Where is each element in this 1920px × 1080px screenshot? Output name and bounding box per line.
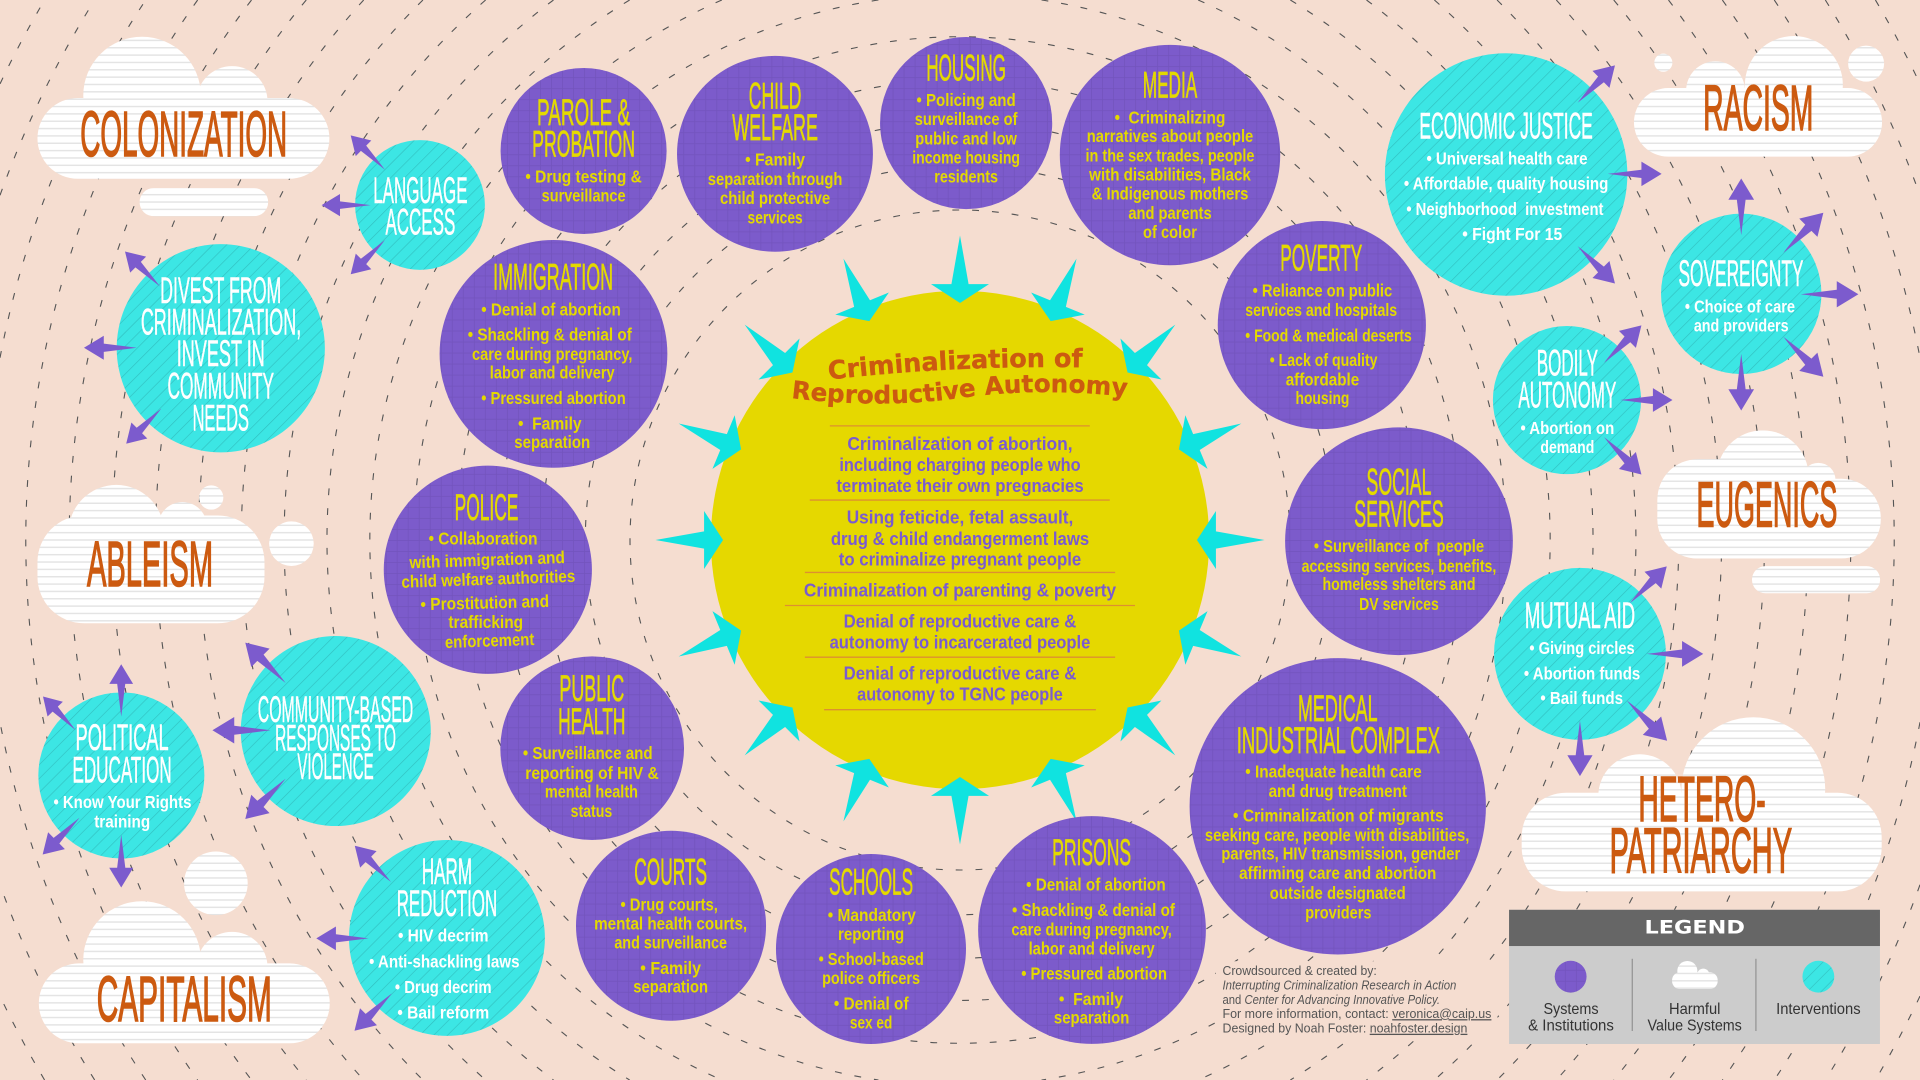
panel: schools [776, 854, 966, 1044]
panel: prisons: care during pregnancy, [1011, 920, 1172, 940]
central list of criminalization forms: including charging people who [839, 454, 1081, 475]
panel: mutual aid [1494, 558, 1703, 776]
panel: medical industrial complex: seeking care, people with disabilities, [1205, 825, 1469, 845]
heading: heteropatriarchy [1610, 764, 1792, 887]
panel: poverty: services and hospitals [1245, 300, 1397, 320]
panel: prisons: separation [1054, 1007, 1129, 1027]
legend item: systems & institutions: & Institutions [1528, 1018, 1614, 1035]
arrows [84, 244, 169, 452]
panel: economic justice: • Fight For 15 [1462, 224, 1563, 244]
panel: immigration: • Denial of abortion [481, 300, 621, 320]
panel: bodily autonomy: AUTONOMY [1518, 374, 1616, 416]
panel: police: trafficking [448, 612, 523, 632]
panel: schools: reporting [838, 924, 904, 944]
panel: poverty: • Food & medical deserts [1245, 326, 1412, 346]
panel: harm reduction [316, 838, 545, 1039]
panel: public health: HEALTH [558, 700, 625, 742]
panel: mutual aid: MUTUAL AID [1525, 594, 1635, 636]
panel: medical industrial complex: providers [1305, 902, 1371, 922]
panel: economic justice: • Universal health care [1426, 148, 1588, 168]
panel: public health: reporting of HIV & [525, 763, 659, 783]
panel: courts: separation [633, 977, 708, 997]
panel: police: enforcement [445, 629, 535, 652]
panel: parole & probation: • Drug testing & [525, 166, 642, 186]
legend [1509, 910, 1880, 1044]
panel: medical industrial complex [1190, 658, 1486, 954]
panel: economic justice: ECONOMIC JUSTICE [1419, 104, 1593, 146]
panel: housing: public and low [915, 128, 1017, 148]
panel: schools: • Denial of [834, 993, 909, 1013]
cloud: ableism: ABLEISM [87, 529, 213, 600]
panel: political education: POLITICAL [76, 716, 169, 758]
panel: immigration: care during pregnancy, [472, 344, 632, 364]
spikes pointing inward [655, 235, 1265, 845]
panel: political education: • Know Your Rights [53, 792, 191, 812]
arrows [1567, 558, 1703, 776]
legend item: harmful value systems [1648, 961, 1742, 1035]
panel: police: • Collaboration [429, 528, 538, 548]
panel: language access [322, 128, 485, 282]
panel: prisons: PRISONS [1052, 831, 1131, 873]
cloud: eugenics [1657, 430, 1881, 593]
panel: media: with disabilities, Black [1088, 164, 1251, 184]
panel: schools: police officers [822, 968, 920, 988]
panel: prisons: • Pressured abortion [1021, 963, 1167, 983]
panel: divest from criminalization: CRIMINALIZATION, [141, 301, 301, 343]
legend item: systems & institutions: Systems [1543, 1001, 1599, 1018]
panel: economic justice: • Affordable, quality housing [1404, 173, 1608, 193]
panel: sovereignty: and providers [1694, 316, 1789, 336]
panel: immigration: IMMIGRATION [493, 256, 613, 298]
central list of criminalization forms: Denial of reproductive care & [844, 611, 1076, 632]
panel: language access: LANGUAGE [373, 169, 468, 211]
panel: mutual aid: • Giving circles [1529, 638, 1635, 658]
panel: social services: • Surveillance of people [1314, 536, 1484, 556]
panel: media: narratives about people [1087, 126, 1254, 146]
panel: police: POLICE [455, 486, 518, 528]
panel: political education: EDUCATION [72, 748, 172, 790]
central list of criminalization forms: Denial of reproductive care & [844, 662, 1076, 683]
panel: divest from criminalization: COMMUNITY [168, 364, 274, 406]
arrows [1596, 317, 1673, 483]
panel: housing: • Policing and [917, 90, 1016, 110]
panel: divest from criminalization: NEEDS [193, 396, 249, 438]
cloud: colonization: COLONIZATION [80, 99, 287, 170]
panel: schools: • School-based [819, 949, 924, 969]
arrows [212, 633, 295, 828]
panel: housing: HOUSING [926, 47, 1006, 89]
panel: media: of color [1143, 222, 1197, 242]
panel: media: & Indigenous mothers [1092, 184, 1248, 204]
panel: medical industrial complex: MEDICAL [1298, 687, 1378, 729]
panel: schools: sex ed [850, 1013, 892, 1033]
panel: child welfare: • Family [745, 150, 805, 170]
panel: courts: • Drug courts, [621, 895, 718, 915]
panel: social services: accessing services, benefits, [1302, 556, 1496, 576]
credits text block: For more information, contact: veronica@caip.us [1223, 1006, 1491, 1021]
panel: police: • Prostitution and [420, 591, 549, 614]
panel: political education: training [94, 811, 150, 831]
panel: child welfare [677, 56, 873, 252]
cloud: ableism [37, 485, 314, 623]
panel: medical industrial complex: • Inadequate health care [1245, 762, 1422, 782]
panel: public health [500, 656, 684, 840]
panel: sovereignty [1661, 179, 1858, 410]
panel: sovereignty: • Choice of care [1685, 297, 1795, 317]
panel: harm reduction: • HIV decrim [398, 926, 489, 946]
panel: courts: • Family [640, 958, 701, 978]
panel: bodily autonomy: • Abortion on [1520, 418, 1614, 438]
panel: immigration: • Pressured abortion [481, 388, 626, 408]
heading: heteropatriarchy: HETERO- [1638, 764, 1766, 835]
panel: divest from criminalization: DIVEST FROM [160, 269, 281, 311]
panel: immigration: • Family [518, 413, 582, 433]
panel: parole & probation: PAROLE & [537, 91, 630, 133]
panel: medical industrial complex: affirming care and abortion [1239, 863, 1436, 883]
panel: child welfare: services [748, 207, 803, 227]
panel: economic justice [1385, 53, 1662, 296]
panel: courts [576, 831, 766, 1021]
central title: Reproductive Autonomy [793, 375, 1128, 408]
legend item: harmful value systems: Harmful [1669, 1001, 1720, 1018]
panel: police: child welfare authorities [401, 566, 576, 592]
panel: public health: • Surveillance and [523, 743, 653, 763]
panel: language access: ACCESS [385, 200, 455, 242]
credits text block: Designed by Noah Foster: noahfoster.design [1223, 1021, 1467, 1036]
central title: Criminalization of [828, 348, 1084, 379]
panel: media: • Criminalizing [1115, 107, 1225, 127]
central title [793, 348, 1128, 408]
credits text block [1216, 961, 1498, 1040]
cloud: capitalism: CAPITALISM [97, 964, 272, 1035]
panel: divest from criminalization: INVEST IN [177, 332, 265, 374]
central list of criminalization forms: Criminalization of abortion, [847, 433, 1073, 454]
panel: prisons: • Family [1059, 989, 1123, 1009]
panel: courts: mental health courts, [594, 913, 747, 933]
panel: immigration [440, 240, 667, 468]
panel: parole & probation [501, 68, 667, 234]
panel: social services: SERVICES [1354, 493, 1444, 535]
credits text block: Interrupting Criminalization Research in Action [1223, 977, 1456, 992]
central list of criminalization forms: drug & child endangerment laws [831, 528, 1089, 549]
panel: harm reduction: • Bail reform [397, 1002, 489, 1022]
arrows [322, 128, 393, 282]
panel: social services: homeless shelters and [1322, 574, 1476, 594]
panel: prisons: • Denial of abortion [1026, 875, 1166, 895]
cloud: capitalism [39, 852, 330, 1043]
cloud: heteropatriarchy [1522, 717, 1882, 891]
central list of criminalization forms [785, 426, 1135, 710]
panel: community-based responses: VIOLENCE [297, 745, 374, 787]
panel: immigration: • Shackling & denial of [468, 324, 632, 344]
panel: medical industrial complex: outside designated [1270, 883, 1406, 903]
panel: medical industrial complex: INDUSTRIAL COMPLEX [1237, 719, 1440, 761]
panel: social services: SOCIAL [1367, 461, 1431, 503]
panel: harm reduction: REDUCTION [397, 882, 497, 924]
central list of criminalization forms: autonomy to incarcerated people [830, 632, 1090, 653]
text: COMMUNITY-BASED [258, 688, 413, 730]
panel: child welfare: WELFARE [732, 106, 818, 148]
central list of criminalization forms: Using feticide, fetal assault, [847, 506, 1073, 527]
arrows [316, 838, 400, 1039]
legend: LEGEND [1644, 918, 1745, 939]
panel: schools: • Mandatory [828, 905, 916, 925]
cloud: racism [1634, 36, 1884, 157]
panel: bodily autonomy [1493, 317, 1673, 483]
panel: social services [1285, 427, 1513, 655]
panel: community-based responses [212, 633, 431, 828]
central list of criminalization forms: to criminalize pregnant people [839, 549, 1081, 570]
panel: housing: income housing [912, 147, 1020, 167]
panel: media: MEDIA [1143, 63, 1197, 105]
legend item: interventions: Interventions [1776, 1001, 1861, 1018]
panel: courts: and surveillance [614, 933, 727, 953]
panel: medical industrial complex: parents, HIV transmission, gender [1221, 844, 1460, 864]
panel: bodily autonomy: BODILY [1537, 342, 1598, 384]
panel: mutual aid: • Bail funds [1540, 688, 1623, 708]
panel: public health: mental health [545, 782, 638, 802]
legend item: interventions [1776, 961, 1861, 1018]
panel: harm reduction: HARM [422, 850, 472, 892]
panel: housing: residents [934, 166, 998, 186]
panel: political education [34, 664, 204, 888]
legend item: systems & institutions [1528, 961, 1614, 1035]
panel: poverty: housing [1296, 388, 1349, 408]
panel: child welfare: separation through [708, 169, 842, 189]
panel: poverty: affordable [1286, 370, 1359, 390]
panel: parole & probation: surveillance [542, 186, 626, 206]
panel: media [1060, 45, 1280, 265]
panel: central sun [656, 236, 1264, 844]
panel: immigration: labor and delivery [490, 363, 615, 383]
panel: poverty: • Lack of quality [1270, 350, 1378, 370]
panel: prisons: labor and delivery [1029, 938, 1155, 958]
panel: poverty: • Reliance on public [1253, 280, 1393, 300]
panel: bodily autonomy: demand [1540, 437, 1594, 457]
panel: harm reduction: • Drug decrim [395, 977, 492, 997]
panel: media: and parents [1128, 203, 1212, 223]
panel: prisons [978, 816, 1206, 1044]
panel: courts: COURTS [634, 850, 707, 892]
panel: child welfare: child protective [720, 188, 830, 208]
panel: medical industrial complex: • Criminalization of migrants [1233, 806, 1444, 826]
panel: public health: status [571, 801, 612, 821]
legend item: harmful value systems: Value Systems [1648, 1018, 1742, 1035]
panel: housing: surveillance of [915, 109, 1018, 129]
panel: prisons: • Shackling & denial of [1012, 900, 1175, 920]
panel: mutual aid: • Abortion funds [1524, 663, 1640, 683]
panel: economic justice: • Neighborhood investment [1406, 199, 1604, 219]
panel: schools: SCHOOLS [829, 860, 913, 902]
credits text block: and Center for Advancing Innovative Policy. [1223, 992, 1440, 1007]
panel: police: with immigration and [408, 547, 565, 572]
cloud: colonization [37, 37, 329, 216]
credits text block: Crowdsourced & created by: [1223, 963, 1377, 978]
panel: community-based responses: RESPONSES TO [275, 716, 396, 758]
panel: child welfare: CHILD [749, 74, 801, 116]
panel: immigration: separation [514, 432, 590, 452]
panel: media: in the sex trades, people [1086, 145, 1255, 165]
panel: divest from criminalization [84, 244, 325, 452]
panel: police [384, 466, 592, 674]
panel: public health: PUBLIC [559, 667, 624, 709]
panel: housing [880, 37, 1052, 209]
arrows [1728, 179, 1858, 410]
central list of criminalization forms: terminate their own pregnacies [836, 475, 1084, 496]
panel: poverty [1218, 221, 1426, 429]
panel: poverty: POVERTY [1280, 237, 1362, 279]
arrows [34, 664, 133, 888]
panel: social services: DV services [1359, 594, 1439, 614]
central list of criminalization forms: Criminalization of parenting & poverty [804, 580, 1117, 601]
arrows [1569, 57, 1662, 292]
panel: parole & probation: PROBATION [532, 123, 635, 165]
panel: medical industrial complex: and drug treatment [1269, 781, 1407, 801]
panel: harm reduction: • Anti-shackling laws [369, 952, 520, 972]
central list of criminalization forms: autonomy to TGNC people [857, 683, 1063, 704]
